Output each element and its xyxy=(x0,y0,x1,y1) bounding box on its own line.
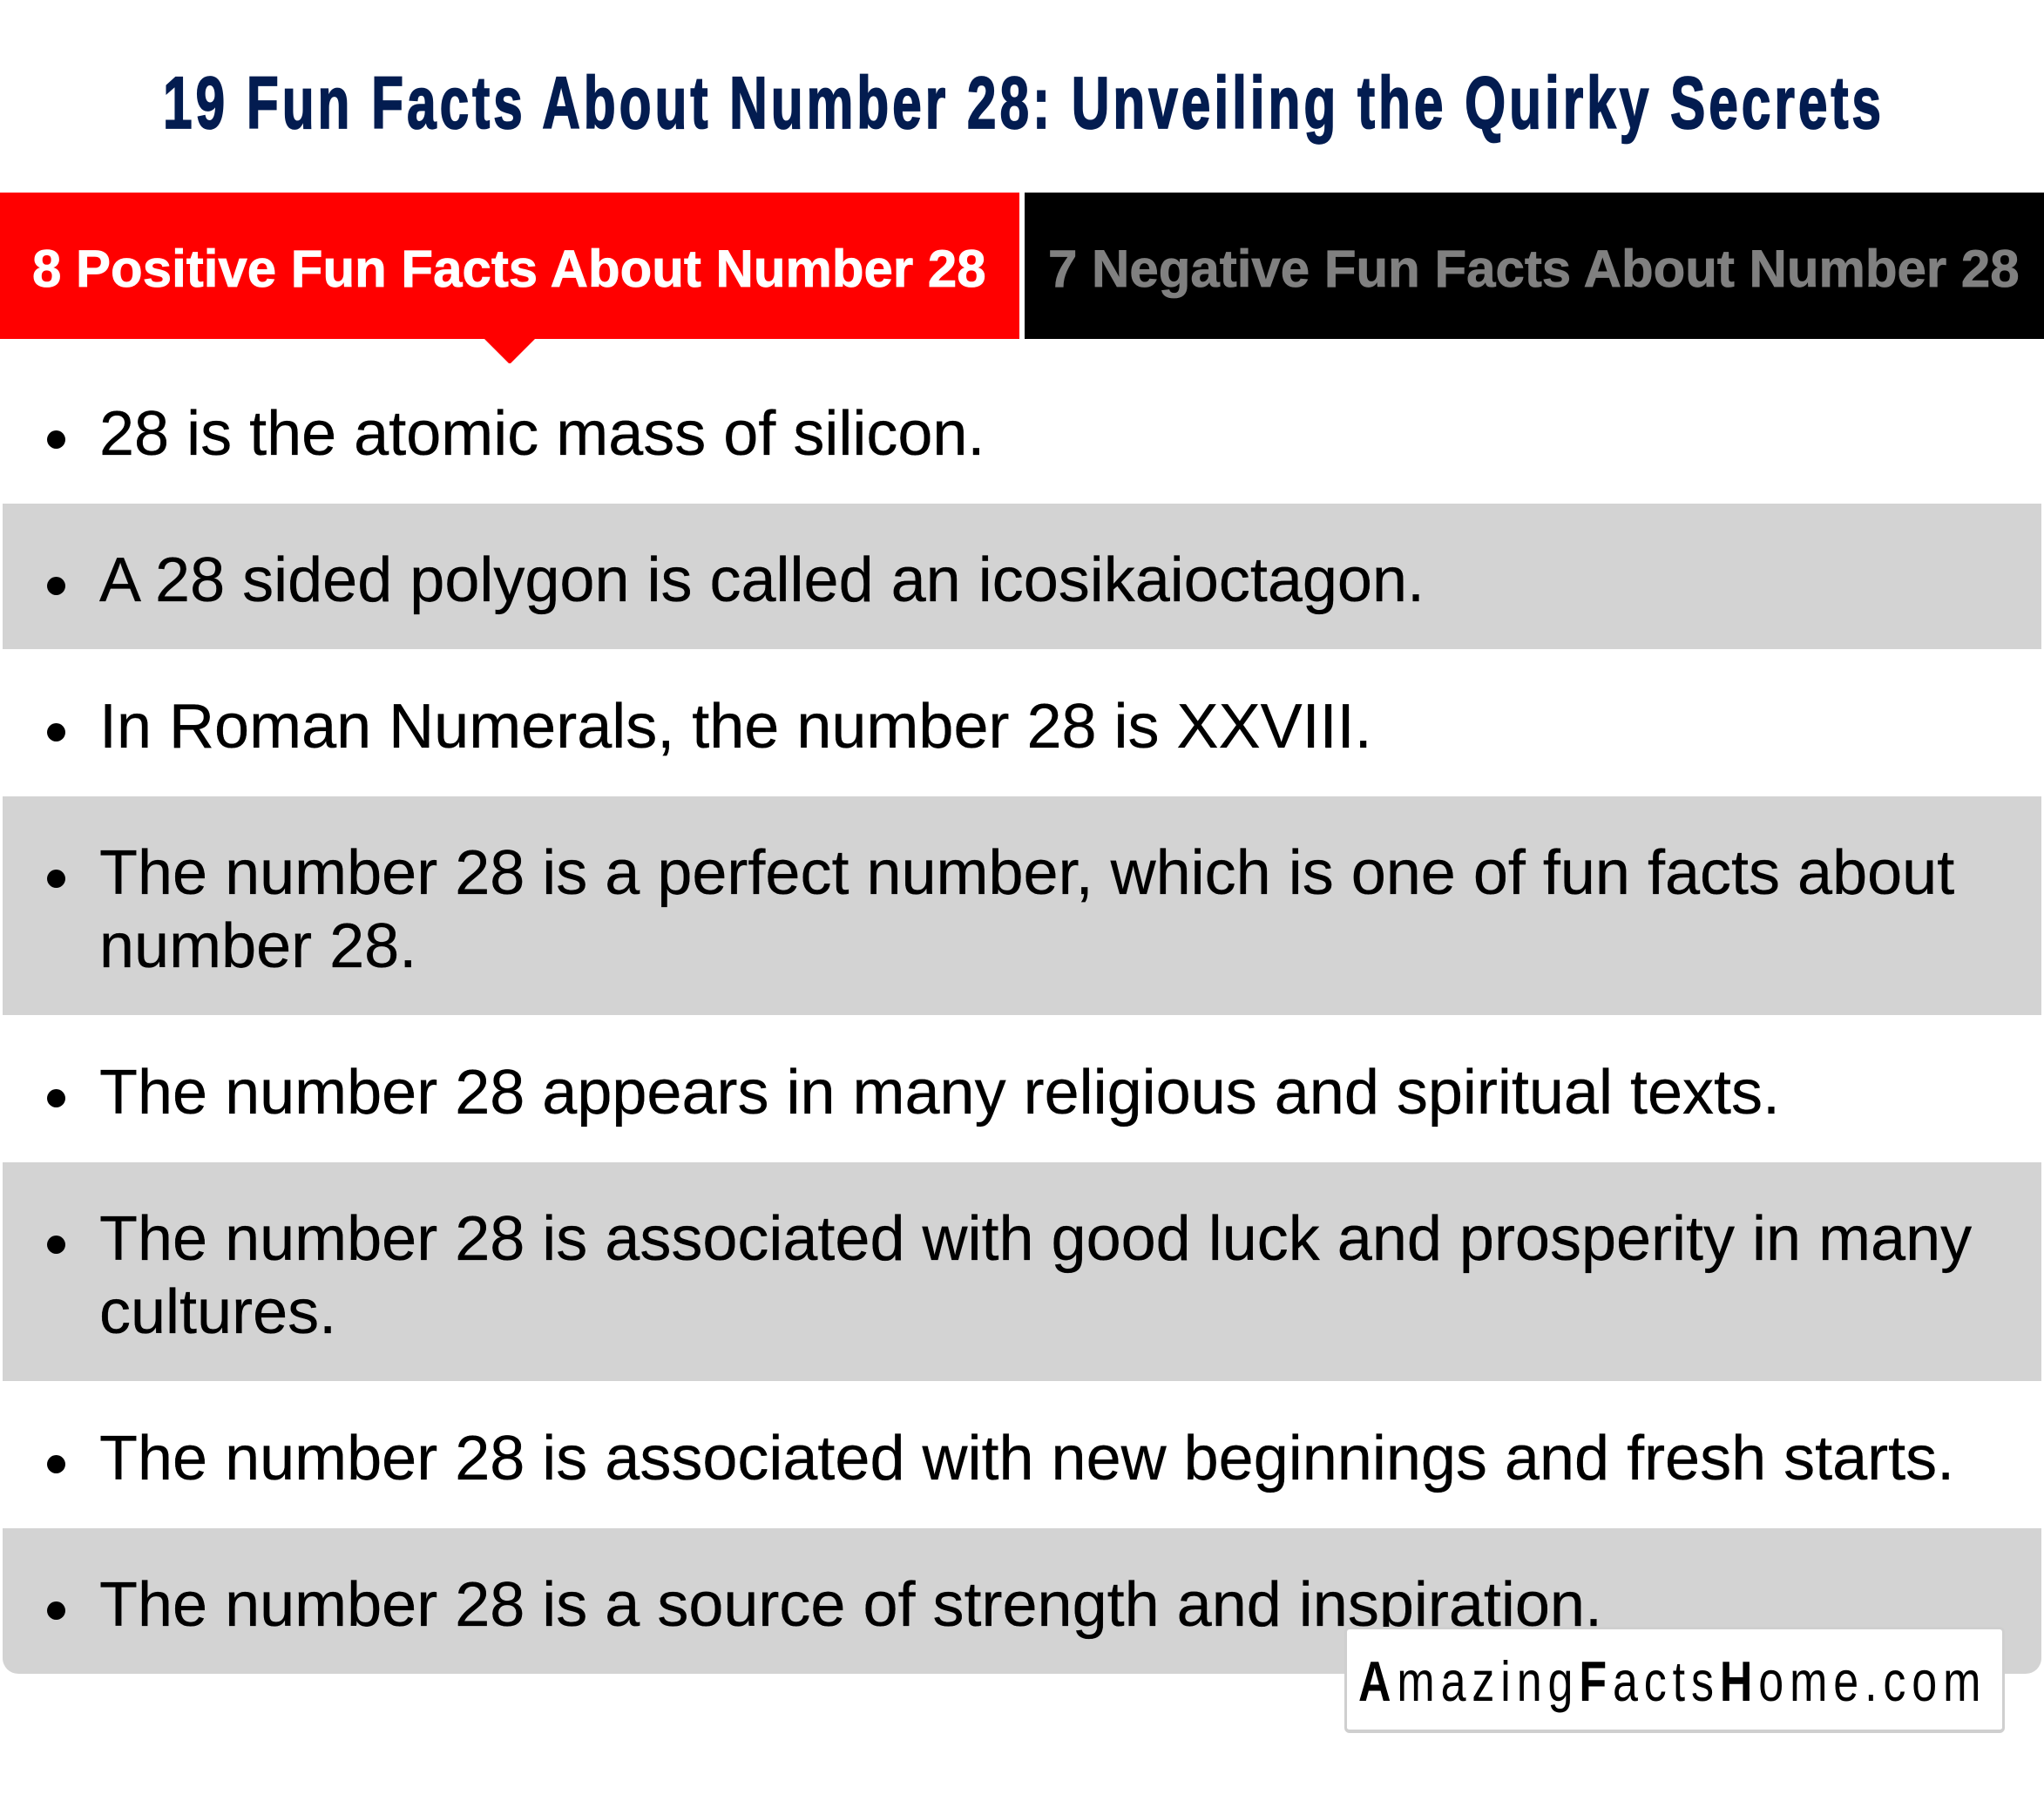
fact row 7: The number 28 is associated with new beginnings and fresh starts. xyxy=(99,1424,1954,1493)
fact row 2: A 28 sided polygon is called an icosikaioctagon. xyxy=(99,545,1425,615)
fact row 4: The number 28 is a perfect number, which is one of fun facts about xyxy=(99,838,1954,908)
tab heading: negative: 7 Negative Fun Facts About Number 28 xyxy=(1048,240,2020,298)
fact row 4 xyxy=(3,796,2041,1015)
fact row 8 xyxy=(3,1528,2041,1674)
title: 19 Fun Facts About Number 28: Unveiling the Quirky Secrets xyxy=(163,62,1881,144)
watermark xyxy=(1344,1627,2005,1733)
tab: negative facts xyxy=(1025,193,2044,339)
watermark text: AmazingFactsHome.com xyxy=(1358,1651,1980,1713)
tab pointer xyxy=(484,339,535,363)
tab: positive facts xyxy=(0,193,1019,339)
fact row 5: The number 28 appears in many religious and spiritual texts. xyxy=(99,1058,1780,1127)
fact row 1: 28 is the atomic mass of silicon. xyxy=(99,399,985,469)
fact row 8: The number 28 is a source of strength and inspiration. xyxy=(99,1570,1602,1640)
fact row 3: In Roman Numerals, the number 28 is XXVIII. xyxy=(99,692,1372,762)
fact row 6 xyxy=(3,1162,2041,1381)
fact row 4: number 28. xyxy=(99,911,416,981)
tab heading: positive: 8 Positive Fun Facts About Number 28 xyxy=(32,240,986,298)
fact row 6: cultures. xyxy=(99,1277,336,1347)
fact row 2 xyxy=(3,504,2041,649)
fact row 6: The number 28 is associated with good luck and prosperity in many xyxy=(99,1204,1972,1274)
